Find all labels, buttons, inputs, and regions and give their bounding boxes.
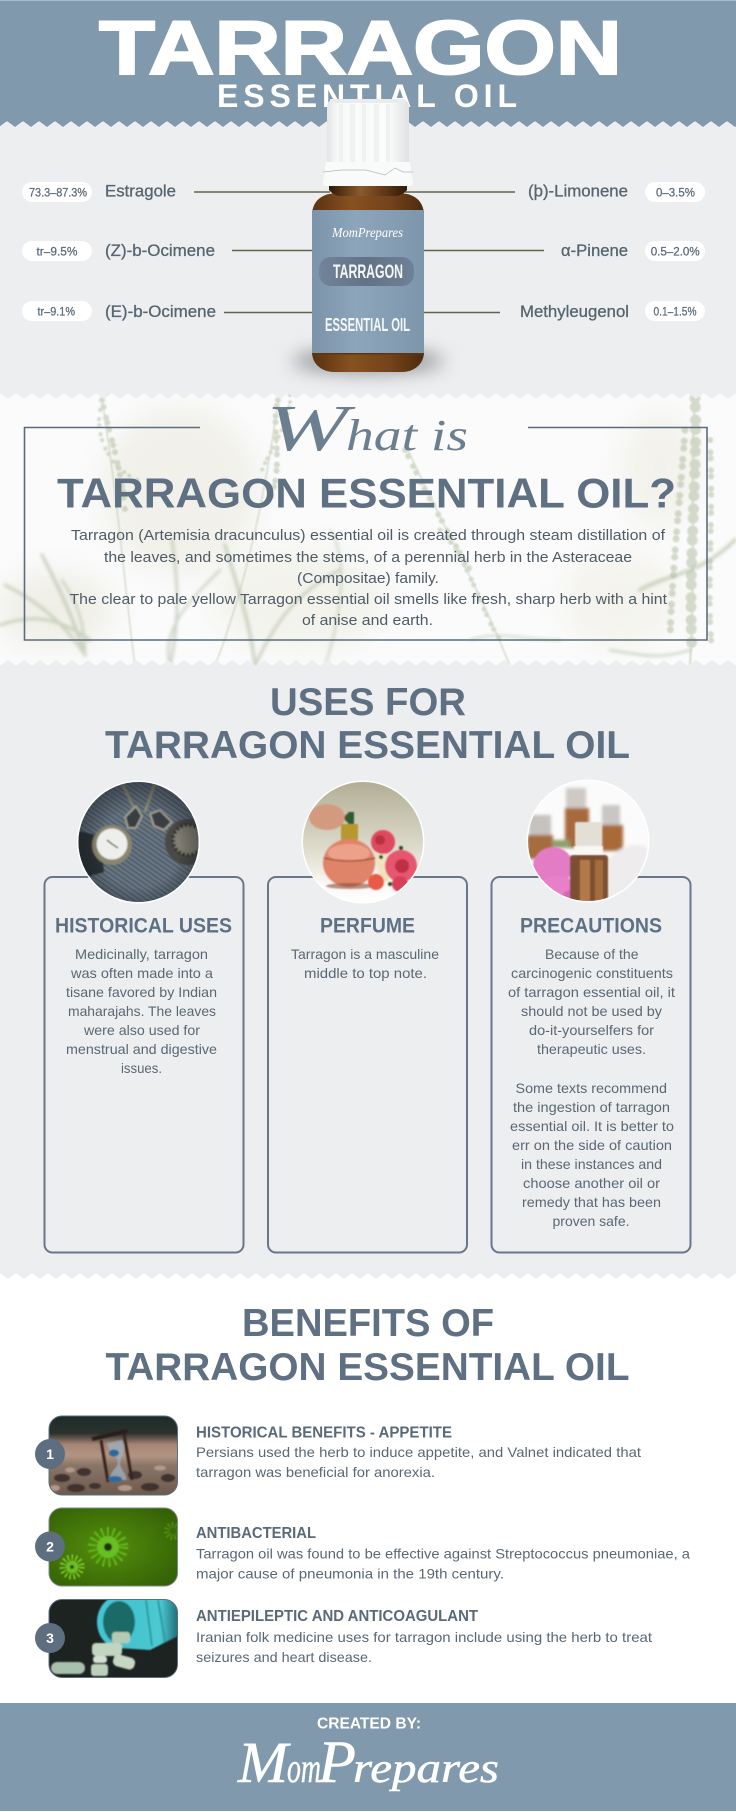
footer: repares — [353, 1746, 499, 1792]
photo: spilled pills — [49, 1596, 178, 1678]
panel: left compounds: Estragole — [105, 182, 176, 200]
panel: left compounds: (E)-b-Ocimene — [105, 302, 216, 321]
number badge 3: 3 — [46, 1630, 54, 1646]
panel: left compounds: tr–9.1% — [38, 304, 75, 318]
text block: precautions: carcinogenic constituents — [511, 965, 673, 981]
text block: what is description: (Compositae) family. — [297, 570, 439, 587]
photo: oil bottles and flowers — [526, 780, 650, 904]
heading: tarragon essential oil question: TARRAGON ESSENTIAL OIL? — [57, 470, 676, 516]
text block: precautions: of tarragon essential oil, it — [508, 984, 675, 1000]
panel: right compounds: (þ)-Limonene — [528, 182, 628, 200]
text block: precautions: the ingestion of tarragon — [513, 1099, 670, 1115]
text block: precautions: therapeutic uses. — [537, 1041, 646, 1057]
text block: precautions: Some texts recommend — [516, 1080, 667, 1096]
panel: precautions card — [492, 780, 690, 1252]
panel: right compounds: 0.5–2.0% — [651, 244, 700, 258]
benefit 1: appetite — [35, 1416, 641, 1495]
benefit 2: antibacterial: major cause of pneumonia in the 19th century. — [196, 1566, 504, 1582]
text block: precautions: essential oil. It is better to — [510, 1118, 674, 1134]
text block: what is description: the leaves, and sometimes the stems, of a perennial herb in the Asteraceae — [104, 549, 632, 566]
text block: precautions: in these instances and — [521, 1156, 662, 1172]
text block: perfume: middle to top note. — [304, 965, 427, 981]
panel: historical uses card — [44, 780, 244, 1252]
footer: M — [237, 1730, 291, 1795]
panel: what is background with plants — [0, 393, 736, 666]
text block: historical uses: maharajahs. The leaves — [68, 1003, 216, 1019]
text block: historical uses: Medicinally, tarragon — [75, 946, 208, 962]
text block: historical uses: tisane favored by Indian — [66, 984, 217, 1000]
number badge 2: 2 — [46, 1538, 54, 1554]
benefit 3: antiepileptic and anticoagulant — [35, 1596, 652, 1678]
text block: perfume — [291, 946, 439, 981]
footer: CREATED BY: — [317, 1716, 421, 1732]
panel: right compounds: α-Pinene — [561, 241, 628, 260]
footer: om — [287, 1746, 321, 1792]
text block: what is description: of anise and earth. — [302, 612, 433, 629]
icon: essential oil bottle — [292, 99, 444, 374]
text block: precautions: proven safe. — [552, 1213, 630, 1229]
text block: precautions: do-it-yourselfers for — [529, 1022, 654, 1038]
heading: uses for: TARRAGON ESSENTIAL OIL — [105, 724, 630, 767]
photo: perfume bottle and flowers — [302, 780, 424, 904]
panel: left compounds: (Z)-b-Ocimene — [105, 241, 215, 260]
panel: what is frame — [24, 428, 707, 640]
text block: precautions: remedy that has been — [522, 1194, 661, 1210]
title — [99, 6, 622, 114]
benefit 1: appetite: HISTORICAL BENEFITS - APPETITE — [196, 1424, 452, 1442]
text block: historical uses — [66, 946, 217, 1076]
icon: essential oil bottle: ESSENTIAL OIL — [325, 315, 410, 335]
panel: right compounds: 0–3.5% — [656, 186, 695, 200]
heading: what is script: hat is — [346, 411, 468, 460]
footer: P — [317, 1729, 356, 1795]
text block: historical uses: was often made into a — [70, 965, 213, 981]
benefit 3: antiepileptic and anticoagulant: Iranian folk medicine uses for tarragon include using the herb to treat — [196, 1629, 652, 1645]
heading: benefits of: TARRAGON ESSENTIAL OIL — [106, 1346, 630, 1389]
text block: historical uses: issues. — [121, 1060, 162, 1076]
heading: benefits of: BENEFITS OF — [242, 1302, 494, 1345]
icon: essential oil bottle: MomPrepares — [331, 225, 403, 240]
text block: what is description: The clear to pale yellow Tarragon essential oil smells like fresh, sharp herb with a hint — [70, 591, 668, 608]
text block: historical uses: were also used for — [83, 1022, 200, 1038]
panel: left compounds — [22, 182, 216, 321]
benefit 1: appetite: tarragon was beneficial for anorexia. — [196, 1464, 435, 1480]
text block: precautions: choose another oil or — [523, 1175, 660, 1191]
panel: precautions card: PRECAUTIONS — [520, 914, 662, 938]
benefit 3: antiepileptic and anticoagulant: seizures and heart disease. — [196, 1649, 372, 1665]
photo: pocket watches on denim — [75, 780, 211, 904]
text block: perfume: Tarragon is a masculine — [291, 946, 439, 962]
panel: historical uses card: HISTORICAL USES — [55, 914, 232, 938]
number badge 1 — [35, 1439, 65, 1469]
text block: precautions: err on the side of caution — [512, 1137, 672, 1153]
icon: essential oil bottle: TARRAGON — [333, 261, 403, 283]
photo: green bacteria — [49, 1508, 179, 1586]
panel: perfume card: PERFUME — [320, 914, 415, 938]
panel: perfume card — [268, 780, 467, 1252]
number badge 2 — [35, 1532, 65, 1562]
panel: right compounds: Methyleugenol — [520, 302, 629, 321]
text block: precautions: should not be used by — [521, 1003, 662, 1019]
header band — [0, 0, 736, 127]
benefit 2: antibacterial — [35, 1508, 690, 1586]
panel: benefits background — [0, 1273, 736, 1703]
text block: what is description: Tarragon (Artemisia dracunculus) essential oil is created through steam distillation of — [71, 527, 666, 544]
text block: precautions — [508, 946, 675, 1229]
title: TARRAGON — [99, 6, 622, 91]
heading: uses for: USES FOR — [270, 681, 466, 724]
heading: benefits of — [106, 1302, 630, 1389]
benefit 3: antiepileptic and anticoagulant: ANTIEPILEPTIC AND ANTICOAGULANT — [196, 1608, 479, 1625]
heading: uses for — [105, 681, 630, 767]
text block: historical uses: menstrual and digestive — [66, 1041, 217, 1057]
text block: precautions: Because of the — [545, 946, 639, 962]
heading: what is script: W — [266, 392, 355, 465]
text block: what is description — [70, 527, 668, 629]
zigzag edges of what is panel — [0, 393, 736, 666]
title: ESSENTIAL OIL — [217, 78, 517, 114]
panel: right compounds: 0.1–1.5% — [654, 304, 697, 318]
footer — [0, 1703, 736, 1812]
benefit 2: antibacterial: Tarragon oil was found to be effective against Streptococcus pneumoniae, a — [196, 1546, 690, 1562]
benefit 2: antibacterial: ANTIBACTERIAL — [196, 1525, 316, 1542]
panel: left compounds: tr–9.5% — [36, 244, 78, 258]
number badge 3 — [35, 1623, 65, 1653]
composition connector lines — [194, 192, 544, 312]
panel: right compounds — [520, 182, 705, 321]
photo: hourglass on rocks — [49, 1416, 178, 1495]
number badge 1: 1 — [46, 1446, 54, 1462]
benefit 1: appetite: Persians used the herb to induce appetite, and Valnet indicated that — [196, 1444, 641, 1460]
panel: left compounds: 73.3–87.3% — [29, 186, 87, 200]
